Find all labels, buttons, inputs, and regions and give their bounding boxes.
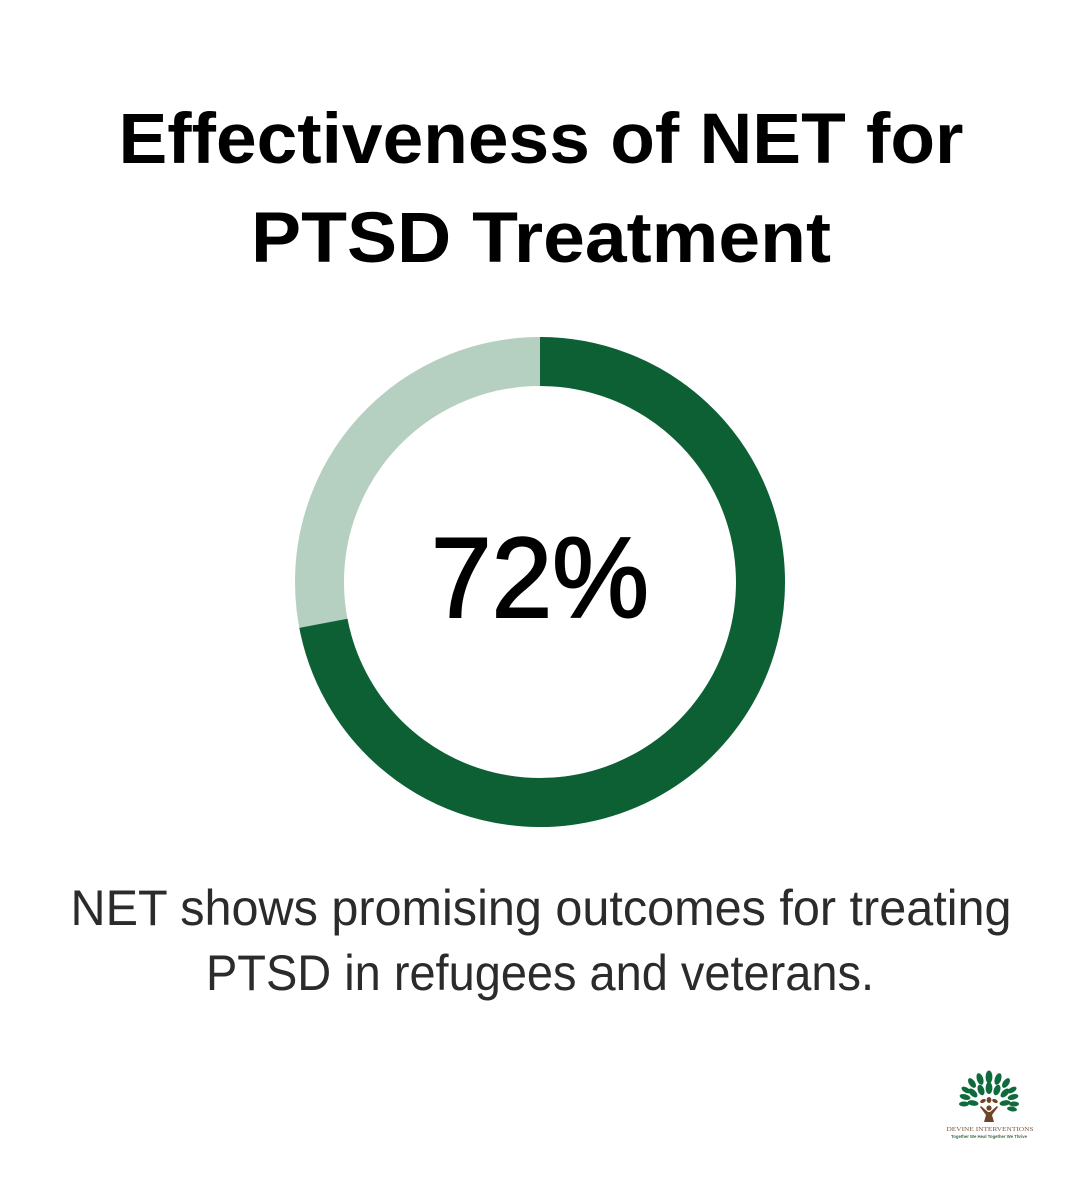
title: Effectiveness of NET for: [118, 100, 964, 179]
icon: tree leaves: [959, 1070, 1019, 1112]
donut value: 72%: [431, 515, 649, 642]
logo: Devine Interventions: [946, 1070, 1034, 1139]
logo name: DEVINE INTERVENTIONS: [946, 1126, 1034, 1133]
icon: tree trunk figure: [980, 1097, 998, 1122]
logo tagline: Together We Heal Together We Thrive: [951, 1134, 1027, 1139]
description text: [70, 880, 1012, 1001]
description text: PTSD in refugees and veterans.: [206, 945, 874, 1001]
title: [118, 100, 964, 278]
description text: NET shows promising outcomes for treating: [70, 880, 1012, 936]
title: PTSD Treatment: [251, 199, 831, 278]
donut chart: 72%: [320, 362, 760, 802]
